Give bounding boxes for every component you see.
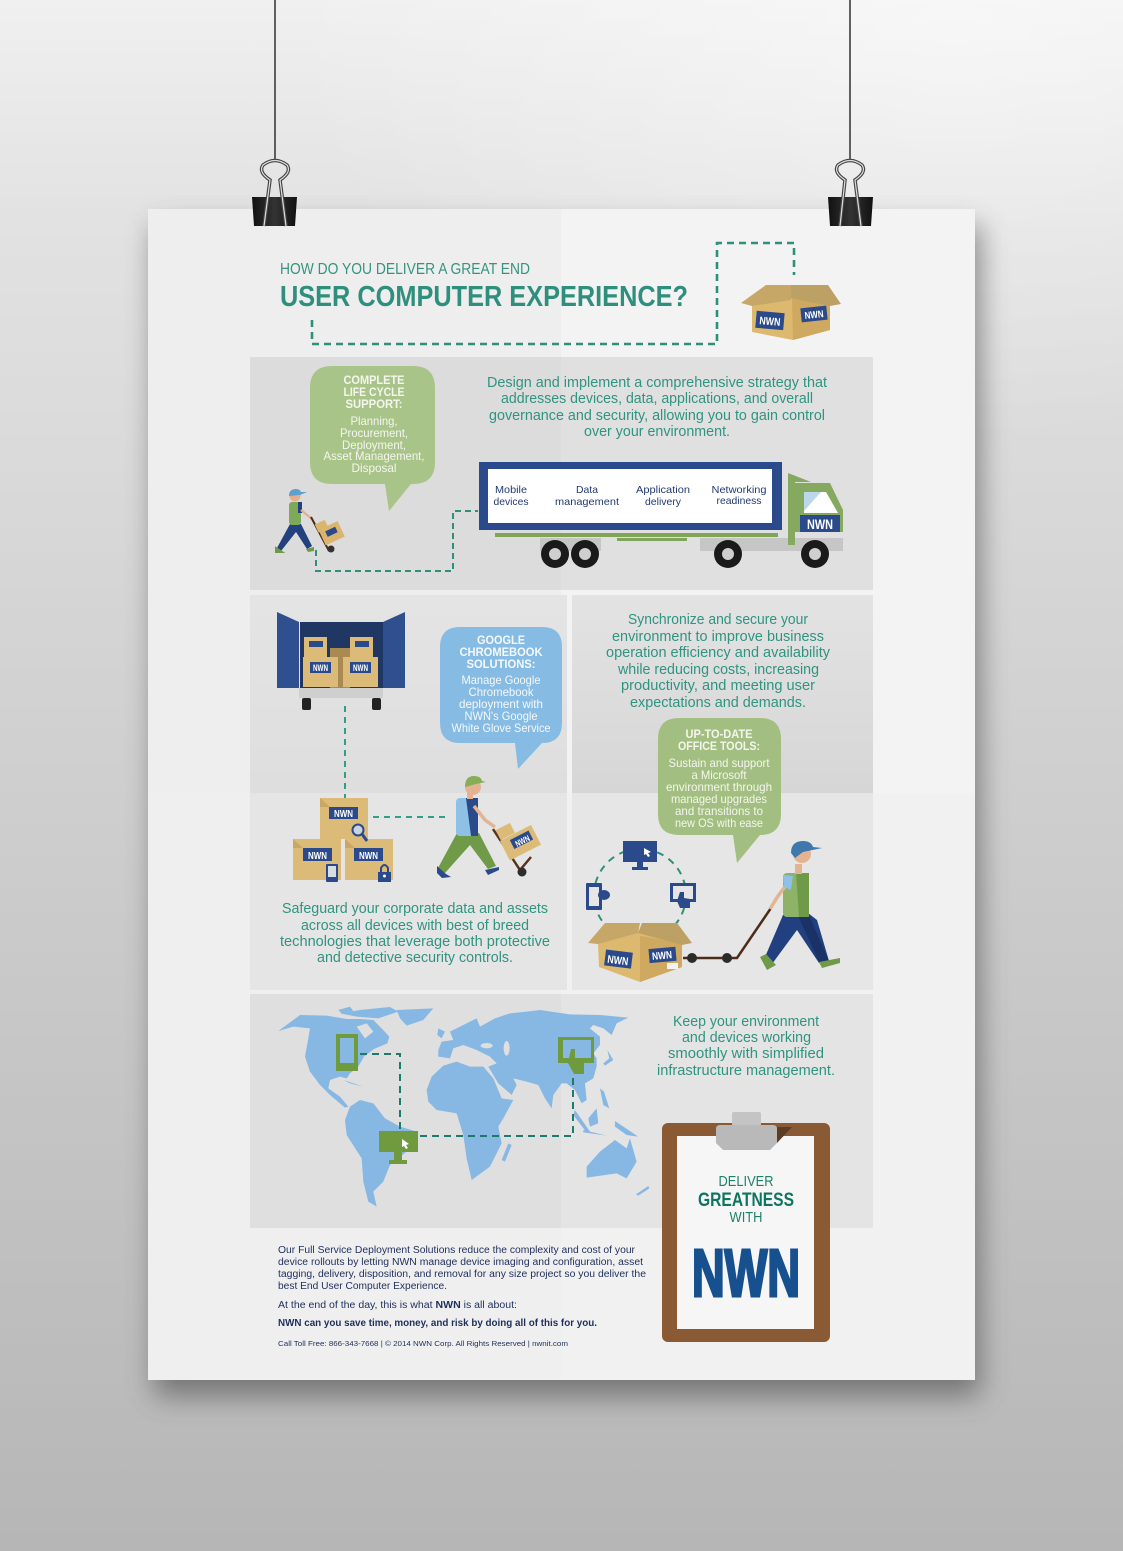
text: safeguard paragraph: technologies that leverage both protective (280, 934, 550, 950)
icon: open delivery box (741, 285, 841, 340)
text: synchronize paragraph: environment to improve business (612, 629, 824, 645)
speech bubble: complete life cycle support: Procurement, (340, 426, 408, 440)
text: safeguard paragraph: Safeguard your corporate data and assets (282, 901, 548, 917)
speech bubble: google chromebook: NWN's Google (464, 709, 538, 723)
icon: phone on map (336, 1034, 358, 1071)
speech bubble: google chromebook: SOLUTIONS: (466, 657, 536, 671)
speech bubble: office tools: environment through (666, 780, 772, 794)
icon: open delivery box: NWN (804, 309, 824, 322)
panel: security (250, 595, 567, 990)
text: infrastructure paragraph (657, 1014, 835, 1079)
text: safeguard paragraph: across all devices with best of breed (301, 918, 529, 934)
text: infrastructure paragraph: Keep your environment (673, 1014, 819, 1030)
text: footer copy: best End User Computer Experience. (278, 1281, 447, 1292)
text: strategy paragraph (487, 375, 827, 440)
illustration: open truck rear with boxes: NWN (313, 663, 328, 673)
truck wheels (541, 540, 829, 568)
speech bubble: complete life cycle support: COMPLETE (344, 373, 404, 387)
speech bubble: complete life cycle support: LIFE CYCLE (344, 385, 404, 399)
text: synchronize paragraph: operation efficiency and availability (606, 645, 831, 661)
illustration: stacked boxes with security icons: NWN (308, 850, 327, 862)
dashed device circle (594, 849, 686, 941)
illustration: small worker with hand truck (276, 489, 345, 552)
illustration: open truck rear with boxes: NWN (353, 663, 368, 673)
icon: monitor on map (379, 1131, 418, 1164)
truck labels: delivery (645, 496, 682, 508)
speech bubble: complete life cycle support: Deployment, (342, 438, 406, 452)
text: footer copy: Call Toll Free: 866-343-7668 | © 2014 NWN Corp. All Rights Reserved | nwnit.com (278, 1339, 568, 1348)
speech bubble: google chromebook: Manage Google (462, 673, 541, 687)
binder clip left (252, 160, 297, 226)
icon: tablet with chat bubble (586, 883, 610, 910)
icon: tablet with touching hand (670, 883, 696, 908)
icon: padlock (378, 865, 391, 882)
illustration: open box on cart (588, 923, 692, 982)
icon: phone (326, 864, 338, 882)
text: footer copy: Our Full Service Deployment Solutions reduce the complexity and cost of your (278, 1245, 636, 1256)
text: safeguard paragraph (280, 901, 550, 966)
poster sheet (148, 209, 975, 1380)
icon: tablet on map (558, 1037, 594, 1074)
truck cab: NWN (807, 516, 833, 532)
speech bubble: google chromebook: deployment with (459, 697, 543, 711)
illustration: stacked boxes with security icons: NWN (359, 850, 378, 862)
illustration: delivery truck (479, 462, 843, 568)
title: HOW DO YOU DELIVER A GREAT END (280, 261, 530, 278)
illustration: open box on cart: NWN (607, 954, 629, 968)
illustration: open box on cart: NWN (652, 949, 673, 963)
text: synchronize paragraph: expectations and demands. (630, 695, 806, 711)
clipboard text: WITH (730, 1210, 762, 1226)
speech bubble: office tools: new OS with ease (675, 816, 763, 830)
text: synchronize paragraph (606, 612, 831, 711)
text: footer copy: At the end of the day, this is what NWN is all about: (278, 1300, 517, 1311)
speech bubble: google chromebook: GOOGLE (477, 633, 525, 647)
dashed links between devices (360, 1054, 573, 1136)
title: USER COMPUTER EXPERIENCE? (280, 281, 688, 313)
speech bubble: complete life cycle support: Asset Management, (324, 449, 424, 463)
text: strategy paragraph: addresses devices, data, applications, and overall (501, 391, 813, 407)
panel: office tools (572, 595, 873, 990)
text: safeguard paragraph: and detective security controls. (317, 950, 513, 966)
text: strategy paragraph: Design and implement a comprehensive strategy that (487, 375, 827, 391)
truck labels: Mobile (495, 484, 527, 496)
speech bubble: office tools: managed upgrades (671, 792, 767, 806)
icon: monitor (623, 841, 657, 870)
text: synchronize paragraph: Synchronize and secure your (628, 612, 808, 628)
text: footer copy: tagging, delivery, disposition, and removal for any size project so you deliver the (278, 1269, 646, 1280)
truck labels: Data (576, 484, 598, 496)
speech bubble: complete life cycle support: Disposal (352, 461, 396, 475)
text: footer copy: device rollouts by letting NWN manage device imaging and configuration, asset (278, 1257, 643, 1268)
truck cab (788, 473, 843, 545)
dashed route from worker to truck (316, 511, 478, 571)
speech bubble: complete life cycle support (310, 366, 435, 511)
speech bubble: office tools: Sustain and support (668, 756, 770, 770)
speech bubble: office tools: a Microsoft (692, 768, 747, 782)
text: infrastructure paragraph: and devices working (682, 1030, 811, 1046)
truck labels: readiness (716, 495, 762, 507)
text: infrastructure paragraph: infrastructure management. (657, 1063, 835, 1079)
icon: magnifier (352, 824, 367, 841)
truck labels: Networking (712, 484, 767, 496)
speech bubble: office tools: UP-TO-DATE (686, 727, 752, 741)
binder clip right (828, 160, 873, 226)
clipboard (662, 1112, 830, 1342)
text: strategy paragraph: governance and security, allowing you to gain control (489, 408, 825, 424)
illustration: open truck rear with boxes (277, 612, 405, 710)
NWN logo: NWN (692, 1236, 800, 1311)
speech bubble: office tools (658, 718, 781, 863)
text: footer copy: NWN can you save time, money, and risk by doing all of this for you. (278, 1318, 597, 1329)
hanging wires (275, 0, 850, 162)
clipboard text: DELIVER (718, 1174, 774, 1190)
text: footer copy (278, 1245, 646, 1348)
speech bubble: google chromebook (440, 627, 562, 769)
illustration: worker with green cap: NWN (514, 833, 531, 849)
speech bubble: office tools: OFFICE TOOLS: (678, 739, 760, 753)
world map (278, 1007, 649, 1207)
icon: open delivery box: NWN (759, 315, 781, 329)
dashed routes between truck, boxes and worker (345, 706, 448, 817)
speech bubble: office tools: and transitions to (675, 804, 763, 818)
illustration: worker with green cap (437, 776, 541, 878)
truck labels: management (555, 496, 619, 508)
illustration: stacked boxes with security icons: NWN (334, 808, 353, 820)
panel: life cycle (250, 357, 873, 590)
dashed route from title to box (312, 243, 794, 344)
title (280, 261, 688, 313)
clipboard text: GREATNESS (698, 1190, 794, 1211)
clipboard text (698, 1174, 794, 1226)
speech bubble: google chromebook: CHROMEBOOK (460, 645, 543, 659)
speech bubble: complete life cycle support: Planning, (350, 414, 398, 428)
poster shadow (154, 226, 980, 1396)
truck labels: Application (636, 484, 690, 496)
panel: infrastructure (250, 994, 873, 1228)
speech bubble: google chromebook: White Glove Service (452, 721, 551, 735)
text: synchronize paragraph: while reducing costs, increasing (617, 662, 819, 678)
text: strategy paragraph: over your environment. (584, 424, 730, 440)
illustration: worker pulling cart (683, 841, 840, 970)
speech bubble: google chromebook: Chromebook (468, 685, 534, 699)
speech bubble: complete life cycle support: SUPPORT: (346, 397, 402, 411)
text: synchronize paragraph: productivity, and meeting user (621, 678, 815, 694)
truck labels (494, 484, 767, 508)
text: infrastructure paragraph: smoothly with simplified (668, 1046, 824, 1062)
truck labels: devices (494, 496, 528, 508)
illustration: stacked boxes with security icons (293, 798, 393, 882)
